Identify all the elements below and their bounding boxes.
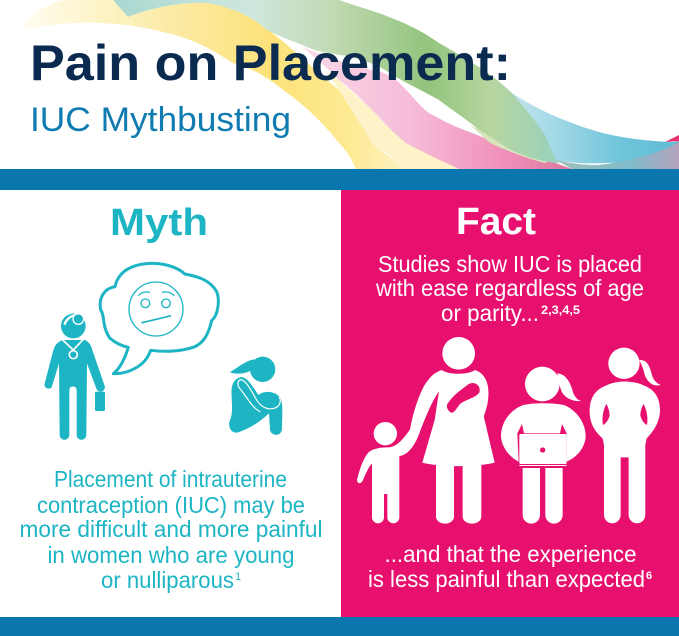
- top blue band: [0, 169, 679, 190]
- fact closing text: is less painful than expected: [368, 566, 645, 592]
- fact intro text: or parity...: [441, 300, 539, 326]
- myth body text: Placement of intrauterine: [54, 466, 287, 492]
- panel: myth: [20, 202, 322, 593]
- fact closing text: 6: [646, 570, 652, 582]
- panel: fact: [357, 201, 661, 592]
- myth body text: [20, 466, 322, 593]
- bottom blue band: [0, 617, 679, 636]
- myth body text: more difficult and more painful: [20, 516, 322, 542]
- icon: woman with laptop: [501, 367, 586, 524]
- icon: mother with baby: [410, 337, 495, 524]
- icon: child: [357, 422, 419, 523]
- icon: seated woman: [229, 357, 282, 435]
- myth body text: 1: [235, 571, 241, 583]
- myth body text: contraception (IUC) may be: [37, 492, 305, 518]
- fact intro text: with ease regardless of age: [375, 275, 644, 301]
- fact closing text: ...and that the experience: [384, 541, 636, 567]
- fact heading: Fact: [456, 201, 536, 243]
- icon: speech bubble: [100, 263, 218, 374]
- fact intro text: [375, 251, 644, 326]
- icon: woman hands on hips: [590, 348, 661, 523]
- myth body text: or nulliparous: [101, 567, 234, 593]
- header ribbons: [20, 0, 679, 169]
- subtitle: IUC Mythbusting: [30, 101, 291, 139]
- fact intro text: 2,3,4,5: [541, 303, 580, 317]
- myth body text: in women who are young: [48, 542, 294, 568]
- icon: doctor: [44, 314, 105, 440]
- icon: worried face: [129, 282, 183, 336]
- panel: fact background: [341, 190, 679, 617]
- myth heading: Myth: [110, 202, 208, 244]
- icon: family group: [357, 337, 661, 524]
- title: Pain on Placement:: [30, 35, 511, 91]
- fact intro text: Studies show IUC is placed: [378, 251, 642, 277]
- fact closing text: [368, 541, 652, 592]
